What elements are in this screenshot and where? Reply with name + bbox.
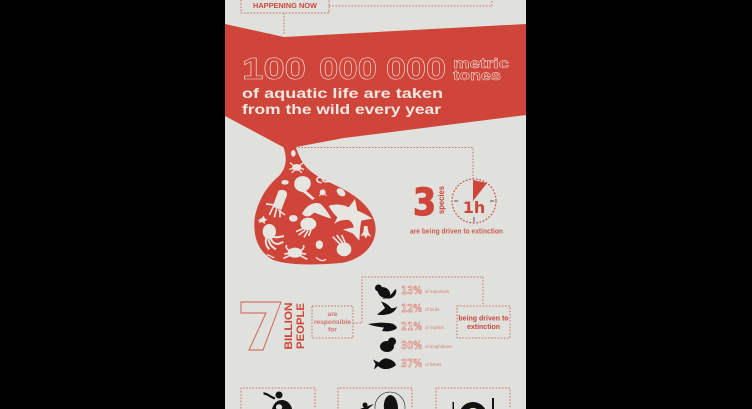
sea creatures <box>257 150 372 261</box>
heading: 100 000 000: 100 <box>242 51 306 86</box>
label billion people <box>283 302 307 350</box>
callout: being driven to extinction: extinction <box>467 324 500 331</box>
row: mammals <box>375 284 450 300</box>
row: amphibians: 30% <box>401 339 422 352</box>
shrimp <box>302 203 331 219</box>
row: mammals: 13% <box>401 284 422 297</box>
row: fishes: 37% <box>401 357 422 370</box>
connector: net to clock <box>295 148 473 180</box>
stat: 7 billion people <box>241 302 307 350</box>
heading: 100 000 000: 000 <box>386 51 446 86</box>
row: birds: of birds <box>425 307 440 312</box>
eel <box>317 177 337 184</box>
callout: are responsible for: are <box>328 311 338 318</box>
connector: bracket around animals <box>353 277 483 323</box>
text: of aquatic life are taken from the wild every year <box>242 85 443 117</box>
icon: plate and cutlery <box>452 398 494 409</box>
row: birds <box>377 302 440 315</box>
text: driven to extinction: are being driven to extinction <box>410 228 503 236</box>
text: of aquatic life are taken from the wild every year: from the wild every year <box>242 101 442 117</box>
heading: 100 000 000: 000 <box>319 51 377 86</box>
heading: metric tones <box>453 55 509 83</box>
row: amphibians: of amphibians <box>425 344 453 349</box>
stat: 3 species per hour <box>410 179 503 236</box>
row: amphibians <box>380 338 453 352</box>
row: birds: 12% <box>401 302 422 315</box>
crab bottom <box>283 245 307 259</box>
row: reptiles <box>368 320 445 333</box>
callout: being driven to extinction <box>457 306 510 338</box>
row: fishes: of fishes <box>425 362 442 367</box>
row: fishes <box>373 357 442 370</box>
text: of aquatic life are taken from the wild every year: of aquatic life are taken <box>242 85 443 101</box>
panel: action box 3 <box>436 388 510 409</box>
callout: happening now box <box>241 0 492 35</box>
number 3: 3 <box>413 181 436 224</box>
row: reptiles: 21% <box>401 320 422 333</box>
jellyfish right <box>333 235 351 256</box>
label billion people: BILLION <box>283 302 295 350</box>
octopus <box>263 224 284 249</box>
small crab <box>289 215 298 222</box>
heading: 100 000 000 <box>242 51 446 86</box>
jellyfish <box>296 218 316 237</box>
callout: are responsible for: responsible <box>314 319 351 326</box>
callout: are responsible for <box>312 306 353 338</box>
callout: are responsible for: for <box>328 326 337 334</box>
heading: metric tones: metric <box>453 55 509 71</box>
row: reptiles: of reptiles <box>425 325 445 330</box>
row: mammals: of mammals <box>425 289 450 294</box>
panel: action box 1 <box>241 388 315 409</box>
chart: net full of sea creatures <box>254 145 376 264</box>
heading: metric tones: tones <box>453 67 501 83</box>
panel: infographic background <box>225 0 526 409</box>
horseshoe crab <box>294 176 315 200</box>
shark <box>329 199 372 241</box>
panel: action box 2 <box>338 388 412 409</box>
callout: happening now box: HAPPENING NOW <box>253 1 318 10</box>
panel: red banner with net <box>225 24 526 147</box>
number 7 outline <box>241 302 281 350</box>
callout: being driven to extinction: being driven to <box>458 316 509 322</box>
crab top <box>289 163 304 173</box>
icon: person <box>264 392 292 409</box>
label species: species <box>436 186 446 214</box>
label billion people: PEOPLE <box>295 303 307 349</box>
list: species percentages <box>368 284 453 370</box>
icon: globe and figure <box>360 392 405 409</box>
icon: clock: 1h <box>463 198 485 217</box>
squid <box>266 190 287 217</box>
